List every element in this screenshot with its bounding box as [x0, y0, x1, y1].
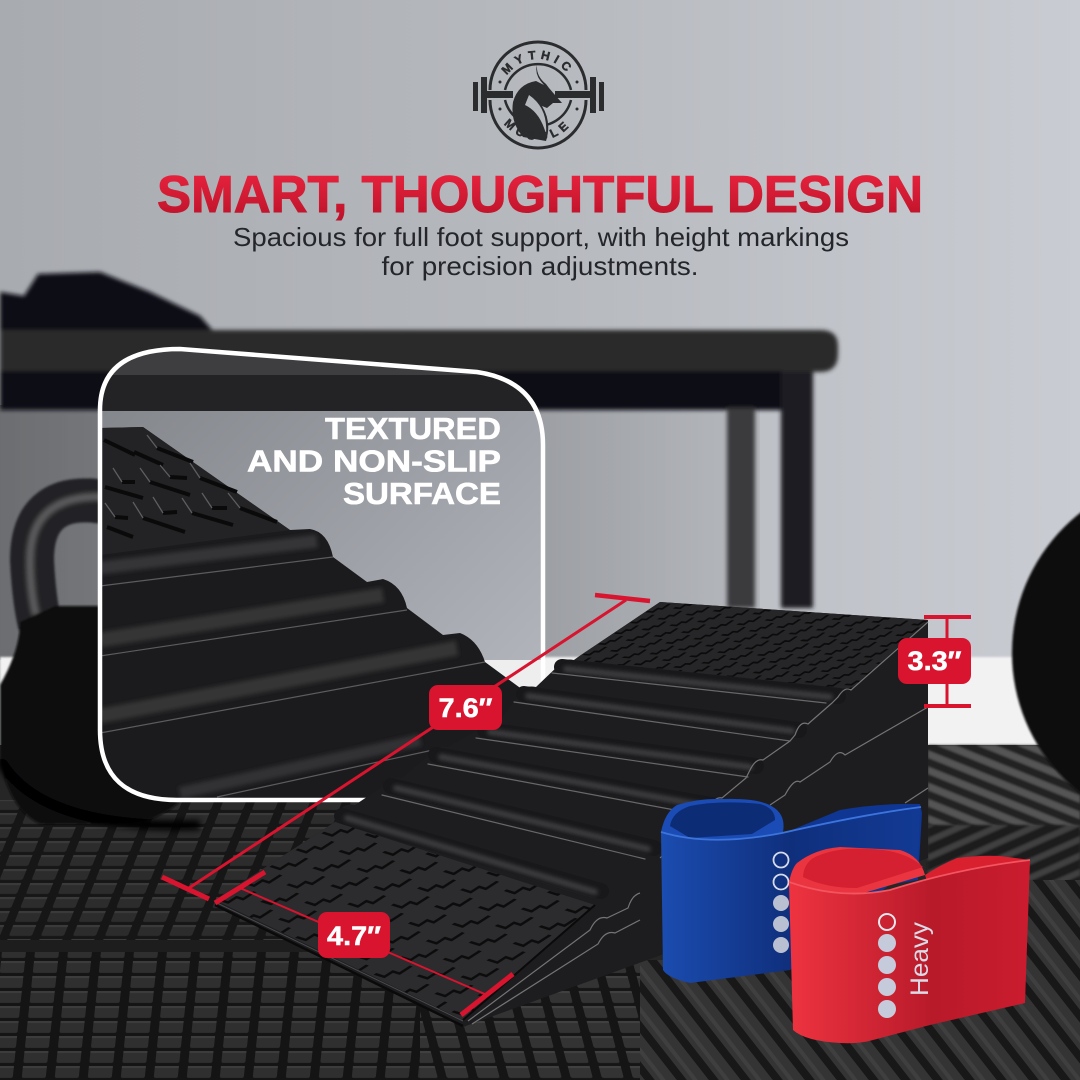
inset heading: textured and non-slip surface: TEXTURED [325, 411, 501, 446]
label: 7.6 inch: 7.6″ [438, 693, 493, 723]
inset: ramp close-up [100, 427, 523, 800]
ramp: silhouette and side face [215, 602, 928, 1027]
logo: brand name [500, 50, 571, 140]
dimension: 7.6 inch length line [162, 595, 650, 899]
subtitle: for precision adjustments. [382, 251, 698, 281]
background: exercise ball [1012, 475, 1080, 831]
dimension: 4.7 inch width line [215, 872, 513, 1015]
panel: close-up inset of textured surface [100, 349, 543, 800]
logo: brand name: MYTHIC [500, 50, 571, 75]
label: 4.7 inch: 4.7″ [327, 921, 381, 951]
inset: tread blocks [104, 435, 277, 537]
logo: Mythic Muscle [473, 40, 604, 150]
product: ramp wedge [215, 602, 928, 1027]
label: 4.7 inch [318, 912, 390, 958]
background: kettlebell [0, 497, 200, 825]
inset heading: textured and non-slip surface: SURFACE [343, 476, 501, 511]
product: blue resistance band [661, 799, 922, 983]
ramp: ridges [342, 667, 838, 892]
ramp: thin front edge layers [215, 902, 595, 1026]
title: SMART, THOUGHTFUL DESIGN [157, 166, 923, 224]
label: 7.6 inch [429, 685, 502, 730]
subtitle: Spacious for full foot support, with height markings [233, 222, 849, 252]
blue band: strength dots [773, 852, 789, 953]
background: floor mat [0, 745, 1080, 1080]
red band: heavy text: Heavy [906, 921, 934, 996]
inset heading: textured and non-slip surface [247, 411, 501, 511]
ramp: right side outline [468, 622, 928, 1024]
logo: brand name: MUSCLE [504, 118, 569, 140]
subtitle [233, 222, 849, 281]
red band: strength dots [878, 914, 896, 1018]
label: 3.3 inch: 3.3″ [908, 646, 962, 676]
inset heading: textured and non-slip surface: AND NON-SLIP [247, 444, 501, 478]
background: wall [0, 0, 1080, 760]
dimension: 3.3 inch height line [924, 617, 971, 706]
label: 3.3 inch [898, 638, 971, 684]
ramp: front textured plate [215, 822, 595, 1020]
product: red resistance band [789, 847, 1030, 1043]
ramp: rear textured plate [574, 602, 928, 689]
background: white baseboard [0, 657, 1080, 757]
background: blurred bench [0, 272, 838, 608]
logo: dragon [512, 65, 562, 141]
